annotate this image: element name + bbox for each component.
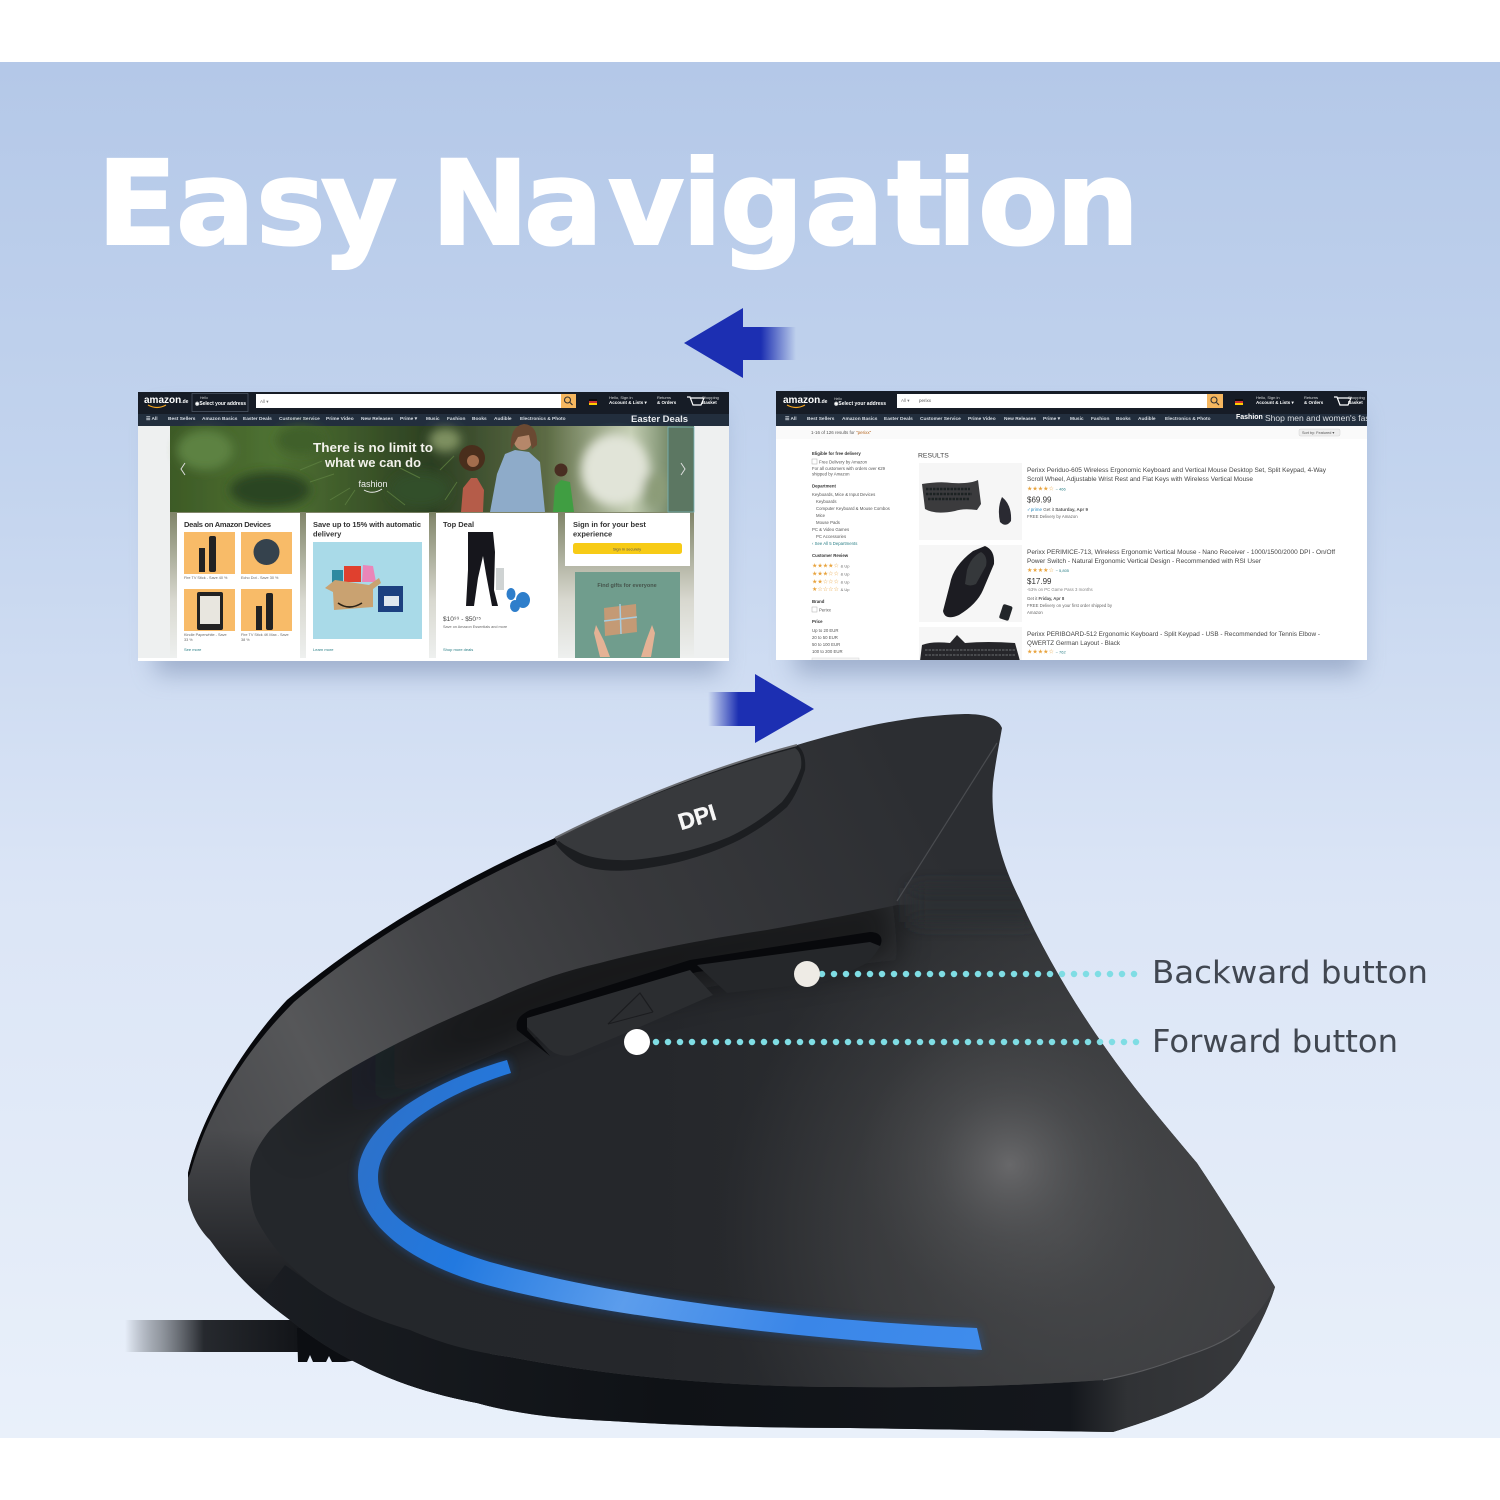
result two bbox=[919, 545, 1335, 622]
mouse body shading bbox=[150, 700, 1300, 1440]
filter sidebar: Customer Review bbox=[812, 553, 849, 558]
backward button bbox=[697, 942, 880, 993]
callout: forward button bbox=[624, 1024, 1398, 1060]
filter sidebar: Perixx bbox=[819, 608, 832, 612]
result one: $69.99 bbox=[1027, 496, 1052, 504]
filter sidebar: Mice bbox=[816, 513, 826, 518]
results heading: RESULTS bbox=[918, 452, 949, 460]
card: deals on amazon devices: Fire TV Stick 4K Max - Save bbox=[241, 633, 289, 637]
card: top deal: Top Deal bbox=[443, 520, 474, 529]
results top navigation bar: Fashion bbox=[1091, 416, 1109, 422]
results top navigation bar: Music bbox=[1070, 416, 1084, 422]
result two: Power Switch - Natural Ergonomic Vertical Design - Recommended with RSI User bbox=[1027, 559, 1261, 565]
home top navigation bar: Prime ▾ bbox=[400, 416, 418, 422]
arrow: forward bbox=[708, 674, 814, 743]
card: top deal bbox=[436, 513, 558, 661]
result two: $17.99 bbox=[1027, 577, 1052, 586]
results top navigation bar bbox=[776, 391, 1386, 426]
home hero banner: fashion bbox=[358, 479, 388, 489]
results top navigation bar: Hello bbox=[834, 397, 842, 401]
home top navigation bar: Hello, Sign in bbox=[609, 395, 633, 400]
filter sidebar: Eligible for free delivery bbox=[812, 451, 861, 456]
card: deals on amazon devices: Deals on Amazon Devices bbox=[184, 520, 271, 529]
results top navigation bar: Shop men and women's fashion bbox=[1265, 413, 1386, 423]
home top navigation bar: Easter Deals bbox=[631, 414, 688, 425]
home top navigation bar bbox=[138, 392, 729, 426]
result two: FREE Delivery on your first order shipped by bbox=[1027, 603, 1113, 608]
home top navigation bar: & Orders bbox=[657, 400, 677, 405]
home top navigation bar: Returns bbox=[657, 395, 671, 400]
filter sidebar: Department bbox=[812, 484, 836, 488]
result one bbox=[919, 463, 1326, 540]
DPI button bbox=[555, 745, 805, 871]
card: deals on amazon devices: Echo Dot - Save 30 % bbox=[241, 576, 279, 580]
results top navigation bar: New Releases bbox=[1004, 416, 1036, 422]
results count strip: 1-16 of 126 results for "perixx" bbox=[811, 430, 872, 435]
filter sidebar: Keyboards, Mice & Input Devices bbox=[812, 492, 875, 497]
filter sidebar: ‹ See All 5 Departments bbox=[812, 541, 857, 546]
result two: Amazon bbox=[1027, 610, 1043, 615]
results top navigation bar: Best Sellers bbox=[807, 416, 835, 422]
card: find gifts bbox=[575, 572, 680, 659]
result two: -53% on PC Game Pass 3 months bbox=[1027, 587, 1093, 592]
filter sidebar: 50 to 100 EUR bbox=[812, 642, 840, 647]
result three: Perixx PERIBOARD-512 Ergonomic Keyboard - Split Keypad - USB - Recommended for Tennis Elbow - bbox=[1027, 632, 1320, 638]
home top navigation bar: ☰ All bbox=[146, 416, 158, 422]
card: deals on amazon devices: Fire TV Stick - Save 40 % bbox=[184, 576, 228, 580]
results top navigation bar: Hello, Sign in bbox=[1256, 395, 1280, 400]
filter sidebar: shipped by Amazon bbox=[812, 472, 850, 476]
home top navigation bar: All ▾ bbox=[260, 399, 269, 404]
results top navigation bar: & Orders bbox=[1304, 400, 1324, 405]
results top navigation bar: Prime Video bbox=[968, 416, 996, 422]
right model bbox=[553, 480, 574, 512]
filter sidebar: Up to 20 EUR bbox=[812, 628, 839, 633]
results count strip bbox=[811, 428, 1340, 436]
result one: ✓prime Get it Saturday, Apr 9 bbox=[1027, 507, 1089, 512]
filter sidebar: Computer Keyboard & Mouse Combos bbox=[816, 506, 890, 511]
home top navigation bar: amazon.de bbox=[144, 395, 189, 406]
filter sidebar: 100 to 200 EUR bbox=[812, 649, 843, 654]
results top navigation bar: Account & Lists ▾ bbox=[1256, 400, 1295, 405]
card: sign in: Sign in securely bbox=[613, 546, 641, 552]
filter sidebar: PC & Video Games bbox=[812, 527, 849, 532]
home top navigation bar: Prime Video bbox=[326, 416, 354, 422]
home top navigation bar: Account & Lists ▾ bbox=[609, 400, 648, 405]
filter sidebar: 20 to 50 EUR bbox=[812, 635, 838, 640]
result one: FREE Delivery by Amazon bbox=[1027, 514, 1078, 519]
result one: Scroll Wheel, Adjustable Wrist Rest and Flat Keys with Wireless Vertical Mouse bbox=[1027, 477, 1254, 483]
result one: ★★★★☆ ~ 466 bbox=[1027, 486, 1066, 492]
filter sidebar: ★☆☆☆☆ & Up bbox=[812, 586, 850, 593]
card: automatic delivery: delivery bbox=[313, 530, 342, 538]
card: top deal: Shop more deals bbox=[443, 647, 473, 652]
results top navigation bar: Easter Deals bbox=[884, 416, 913, 422]
arrow: back bbox=[684, 308, 796, 378]
home top navigation bar: Electronics & Photo bbox=[520, 416, 566, 422]
side button recess bbox=[517, 932, 882, 1056]
result three: ★★★★☆ ~ 762 bbox=[1027, 648, 1066, 656]
card: find gifts: Find gifts for everyone bbox=[597, 583, 657, 589]
results top navigation bar: Shopping bbox=[1348, 395, 1365, 400]
filter sidebar: Price bbox=[812, 619, 823, 624]
card: automatic delivery bbox=[306, 513, 429, 661]
home top navigation bar: Customer Service bbox=[279, 416, 320, 422]
home top navigation bar: Fashion bbox=[447, 416, 465, 422]
home top navigation bar: Best Sellers bbox=[168, 416, 196, 422]
home top navigation bar: Hello bbox=[200, 396, 208, 400]
home top navigation bar: Easter Deals bbox=[243, 416, 272, 422]
home top navigation bar: New Releases bbox=[361, 416, 393, 422]
filter sidebar bbox=[812, 451, 890, 664]
home top navigation bar: Music bbox=[426, 416, 440, 422]
screenshot: amazon search results bbox=[776, 391, 1386, 674]
results top navigation bar: perixx bbox=[919, 398, 932, 403]
vertical mouse bbox=[150, 700, 1300, 1440]
filter sidebar: Brand bbox=[812, 599, 825, 604]
results count strip: Sort by: Featured ▾ bbox=[1302, 431, 1334, 435]
mouse cable bbox=[125, 1320, 357, 1362]
home hero banner: There is no limit to bbox=[313, 440, 433, 455]
home top navigation bar: Shopping bbox=[702, 395, 719, 400]
home top navigation bar: Audible bbox=[494, 416, 512, 422]
filter sidebar: Free Delivery by Amazon bbox=[819, 460, 868, 464]
filter sidebar: PC Accessories bbox=[816, 534, 846, 539]
card: deals on amazon devices: See more bbox=[184, 647, 202, 652]
results top navigation bar: ☰ All bbox=[785, 416, 797, 422]
left model bbox=[461, 478, 484, 512]
result two: Perixx PERIMICE-713, Wireless Ergonomic Vertical Mouse - Nano Receiver - 1000/1500/2000 DPI - On/Off bbox=[1027, 550, 1335, 556]
results top navigation bar: Amazon Basics bbox=[842, 416, 878, 422]
home top navigation bar: Books bbox=[472, 416, 487, 422]
result two: ★★★★☆ ~ 5,805 bbox=[1027, 567, 1070, 574]
card: deals on amazon devices bbox=[177, 513, 300, 661]
result one: Perixx Periduo-605 Wireless Ergonomic Keyboard and Vertical Mouse Desktop Set, Split Keypad, 4-Way bbox=[1027, 468, 1326, 474]
results top navigation bar: Customer Service bbox=[920, 416, 961, 422]
forward button bbox=[527, 970, 713, 1056]
results top navigation bar: Prime ▾ bbox=[1043, 416, 1061, 422]
card: automatic delivery: Learn more bbox=[313, 647, 334, 652]
card: automatic delivery: Save up to 15% with automatic bbox=[313, 520, 421, 529]
filter sidebar: ★★★★☆ & Up bbox=[812, 562, 850, 570]
result two: Get it Friday, Apr 8 bbox=[1027, 596, 1065, 601]
DPI label: DPI bbox=[675, 799, 719, 835]
callout: backward button bbox=[794, 955, 1428, 991]
filter sidebar: For all customers with orders over €29 bbox=[812, 466, 886, 471]
filter sidebar: Keyboards bbox=[816, 499, 837, 504]
home hero banner: what we can do bbox=[324, 455, 421, 470]
results top navigation bar: Basket bbox=[1348, 400, 1363, 405]
results top navigation bar: Returns bbox=[1304, 395, 1318, 400]
results top navigation bar: amazon.de bbox=[783, 395, 828, 406]
card: deals on amazon devices: Kindle Paperwhite - Save bbox=[184, 633, 227, 637]
results top navigation bar: Fashion bbox=[1236, 414, 1263, 421]
title: Easy Navigation bbox=[97, 135, 1139, 272]
card: sign in: Sign in for your best bbox=[573, 520, 646, 529]
home top navigation bar: ◉Select your address bbox=[195, 401, 246, 407]
results top navigation bar: All ▾ bbox=[901, 398, 910, 403]
result three: QWERTZ German Layout - Black bbox=[1027, 641, 1121, 647]
home top navigation bar: Basket bbox=[702, 400, 717, 405]
callout: forward button: Forward button bbox=[1152, 1024, 1398, 1060]
blue light strip bbox=[358, 1060, 982, 1350]
filter sidebar: Mouse Pads bbox=[816, 520, 840, 525]
result three bbox=[919, 627, 1320, 661]
home hero banner bbox=[170, 424, 694, 658]
filter sidebar: ★★☆☆☆ & Up bbox=[812, 578, 850, 586]
card: sign in: experience bbox=[573, 530, 612, 538]
card: deals on amazon devices: 38 % bbox=[241, 638, 250, 642]
results top navigation bar: ◉Select your address bbox=[834, 401, 886, 407]
results top navigation bar: Audible bbox=[1138, 416, 1156, 422]
callout: backward button: Backward button bbox=[1152, 955, 1428, 991]
results top navigation bar: Books bbox=[1116, 416, 1131, 422]
centre model bbox=[490, 450, 545, 512]
results top navigation bar: Electronics & Photo bbox=[1165, 416, 1211, 422]
card: sign in bbox=[565, 513, 690, 566]
filter sidebar: ★★★☆☆ & Up bbox=[812, 570, 850, 578]
card: deals on amazon devices: 33 % bbox=[184, 638, 193, 642]
card: top deal: $10⁹⁹ - $50⁷⁵ bbox=[443, 616, 481, 623]
screenshot: amazon home page bbox=[138, 392, 729, 674]
home top navigation bar: Amazon Basics bbox=[202, 416, 238, 422]
card: top deal: Save on Amazon Essentials and more bbox=[443, 625, 507, 629]
